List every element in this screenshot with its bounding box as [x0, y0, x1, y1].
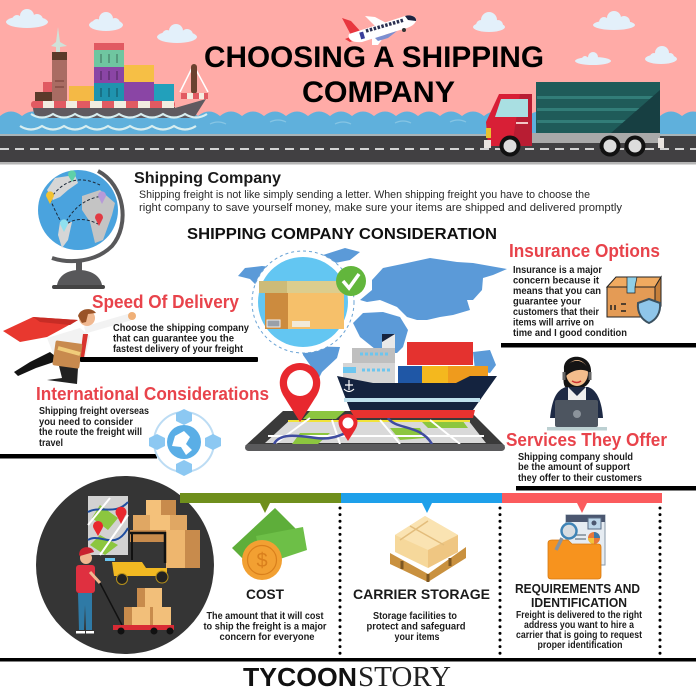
- text: requirements: proper identification: [538, 640, 623, 651]
- text: insurance options: Insurance is a major: [513, 265, 602, 276]
- road: [0, 134, 696, 164]
- icon: globe: [38, 170, 123, 289]
- logo: tycoonstory: [243, 661, 451, 693]
- containers: [35, 43, 174, 101]
- cab: [484, 94, 532, 148]
- intro text: [139, 189, 623, 214]
- text: insurance options: guarantee your: [513, 296, 581, 308]
- ship spire: [51, 27, 67, 52]
- heading: requirements and identification: IDENTIFICATION: [531, 596, 627, 610]
- forklift: [105, 533, 168, 584]
- ship hull: [337, 376, 497, 418]
- heading: shipping company: Shipping Company: [134, 170, 281, 187]
- panel: carrier storage: [353, 516, 490, 643]
- chassis: [532, 133, 664, 148]
- text: speed of delivery: [113, 323, 250, 355]
- container ship: [337, 334, 497, 418]
- heading: requirements and identification: REQUIREMENTS AND: [515, 582, 640, 596]
- text: insurance options: items will arrive on: [513, 318, 594, 328]
- panel: warehouse circle illustration: [36, 476, 214, 654]
- stacked boxes: [130, 500, 200, 568]
- superstructure: [343, 334, 395, 384]
- icon: green check: [336, 266, 366, 296]
- text: speed of delivery: that can guarantee you the: [113, 334, 235, 344]
- wave crests: [20, 114, 207, 130]
- panel: insurance options: [501, 241, 696, 348]
- title: [204, 41, 544, 109]
- text: services they offer: be the amount of support: [518, 462, 631, 473]
- text: carrier storage: Storage facilities to: [373, 611, 457, 622]
- text: services they offer: Shipping company should: [518, 452, 633, 463]
- icon: cardboard box: [259, 281, 345, 329]
- delivery worker: [76, 547, 100, 634]
- ship containers: [398, 342, 488, 383]
- logo: tycoonstory: STORY: [358, 661, 451, 693]
- decorative color bars: [180, 493, 662, 658]
- heading: services they offer: Services They Offer: [506, 430, 667, 450]
- sea: [0, 110, 696, 135]
- text: carrier storage: protect and safeguard: [366, 622, 466, 632]
- text: insurance options: time and I good condition: [513, 328, 627, 339]
- cargo ship: [20, 27, 208, 130]
- icon: small red pin: [339, 414, 357, 441]
- heading: requirements and identification: [515, 582, 640, 610]
- truck: [484, 82, 664, 156]
- text: carrier storage: [366, 611, 466, 643]
- icon: support agent: [547, 357, 607, 430]
- heading: speed of delivery: Speed Of Delivery: [92, 292, 239, 312]
- world map: [238, 248, 507, 380]
- icon: large red pin: [280, 363, 320, 422]
- icon: globe with cubes: [149, 409, 221, 476]
- text: speed of delivery: fastest delivery of your freight: [113, 344, 244, 355]
- icon: flying delivery man: [3, 309, 136, 384]
- text: international considerations: Shipping freight overseas: [39, 406, 150, 417]
- text: international considerations: travel: [39, 438, 63, 449]
- icon: money: $: [256, 550, 268, 572]
- heading: shipping company consideration: SHIPPING COMPANY CONSIDERATION: [187, 226, 497, 243]
- icon: folder and documents: [548, 515, 605, 579]
- text: international considerations: the route the freight will: [39, 427, 142, 438]
- hull: [31, 99, 206, 118]
- tablet map: [245, 411, 505, 451]
- text: international considerations: [39, 406, 150, 449]
- text: requirements: Freight is delivered to the right: [516, 610, 643, 621]
- icon: insured box: [607, 277, 661, 323]
- trailer: [536, 82, 660, 133]
- intro text: Shipping freight is not like simply sending a letter. When shipping freight you have to choose the: [139, 189, 590, 201]
- text: cost: [204, 611, 327, 643]
- text: speed of delivery: Choose the shipping company: [113, 323, 250, 334]
- text: cost: The amount that it will cost: [206, 611, 324, 622]
- wheels: [500, 136, 646, 156]
- intro text: right company to save yourself money, make sure your items are shipped and delivered promptly: [139, 202, 623, 214]
- box circle: [252, 251, 354, 353]
- heading: international considerations: International Considerations: [36, 384, 269, 404]
- heading: carrier storage: CARRIER STORAGE: [353, 586, 490, 602]
- text: cost: concern for everyone: [220, 632, 315, 643]
- central illustration: [238, 248, 507, 451]
- text: international considerations: you need to consider: [39, 417, 133, 428]
- text: requirements: [516, 610, 643, 651]
- text: services they offer: [518, 452, 643, 484]
- text: insurance options: [513, 265, 627, 339]
- funnel: [52, 52, 67, 101]
- text: insurance options: means that you can: [513, 286, 601, 297]
- panel: international considerations: [0, 384, 269, 476]
- logo: tycoonstory: TYCOON: [243, 662, 357, 692]
- rear mast: [180, 64, 208, 99]
- clouds: [6, 9, 677, 65]
- panel: speed of delivery: [3, 292, 258, 384]
- heading: insurance options: Insurance Options: [509, 241, 660, 261]
- panel: requirements and identification: [515, 515, 643, 651]
- icon: pallet of boxes: [390, 516, 466, 582]
- title: COMPANY: [302, 76, 455, 109]
- text: requirements: carrier that is going to request: [516, 630, 643, 641]
- heading: cost: COST: [246, 587, 285, 602]
- text: insurance options: concern because it: [513, 276, 600, 286]
- panel: services they offer: [506, 357, 696, 490]
- panel: cost: [204, 508, 327, 643]
- text: carrier storage: your items: [394, 632, 440, 643]
- panel: shipping company intro: [38, 170, 623, 289]
- text: services they offer: they offer to their customers: [518, 473, 643, 484]
- icon: airplane: [342, 15, 416, 45]
- cart with boxes: [100, 583, 174, 634]
- text: insurance options: customers that their: [513, 307, 599, 318]
- icon: city map: [88, 496, 128, 555]
- title: CHOOSING A SHIPPING: [204, 41, 544, 74]
- header banner: [0, 0, 696, 164]
- text: requirements: address you want to hire a: [524, 620, 634, 631]
- text: cost: to ship the freight is a major: [204, 622, 327, 632]
